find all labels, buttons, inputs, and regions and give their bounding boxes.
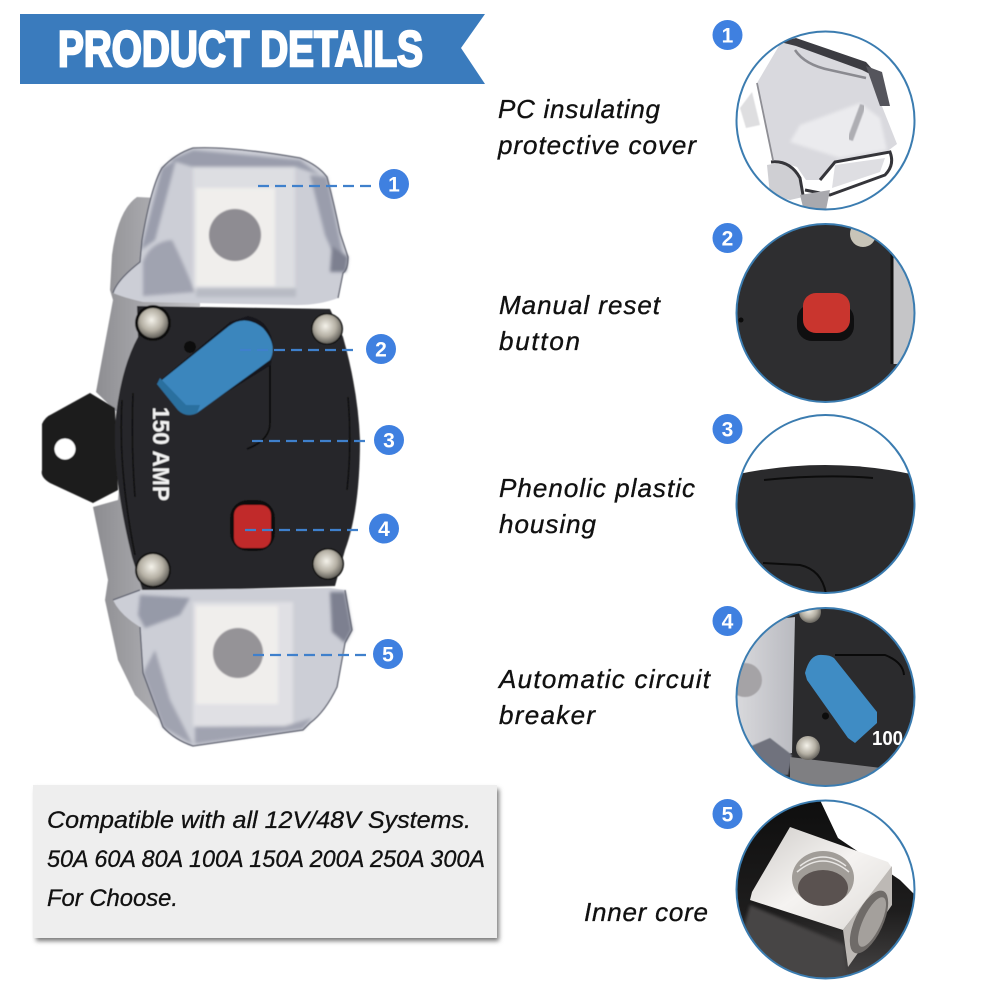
label 2: Manual reset [499, 290, 662, 320]
blue switch paddle [157, 316, 273, 415]
detail circle 5: inner core [736, 800, 916, 980]
mounting tab [42, 393, 118, 503]
detail circle 3: housing [736, 414, 916, 594]
number badge 4 [712, 606, 742, 636]
callout 4 [245, 514, 399, 544]
label 3: housing [499, 509, 597, 539]
number badge 5: 5 [722, 804, 734, 826]
callout 2: 2 [375, 338, 387, 362]
number badge 4: 4 [722, 610, 734, 634]
callout 4: 4 [378, 518, 390, 541]
label 4: breaker [499, 700, 596, 730]
number badge 3: 3 [722, 418, 733, 442]
number badge 2 [712, 223, 742, 253]
callout 3 [252, 425, 404, 455]
label 3 [499, 473, 695, 539]
black face plate [115, 306, 360, 592]
label 1: PC insulating [498, 94, 661, 124]
lower translucent cover [113, 588, 352, 746]
label 1 [497, 94, 697, 160]
number badge 1: 1 [722, 24, 734, 48]
callout 5: 5 [382, 644, 394, 666]
number badge 5 [712, 799, 742, 829]
label 4 [497, 664, 712, 730]
detail circle 4: circuit breaker paddle: 100 [872, 728, 903, 750]
rating text: 150 AMP [148, 407, 174, 501]
title banner: PRODUCT DETAILS [58, 21, 423, 77]
compatibility note panel: Compatible with all 12V/48V Systems. [47, 807, 471, 834]
callout 1 [258, 169, 409, 199]
label 5: Inner core [584, 897, 708, 927]
number badge 2: 2 [722, 228, 733, 250]
callout 3: 3 [383, 430, 395, 452]
callout 2 [240, 334, 396, 364]
slot line [247, 360, 270, 449]
compatibility note panel: 50A 60A 80A 100A 150A 200A 250A 300A [47, 846, 485, 873]
title banner [20, 14, 485, 84]
product photo: circuit breaker [42, 148, 360, 746]
red reset button [230, 500, 275, 551]
upper translucent cover [113, 148, 348, 305]
label 1: protective cover [497, 130, 697, 160]
compatibility note panel: For Choose. [47, 885, 178, 912]
number badge 3 [712, 414, 742, 444]
number badge 1 [712, 20, 742, 50]
callout 1: 1 [388, 174, 400, 196]
callout 5 [253, 639, 403, 669]
compatibility note panel [33, 785, 499, 941]
bolts [135, 305, 344, 588]
label 2 [499, 290, 662, 356]
label 4: Automatic circuit [497, 664, 712, 694]
label 3: Phenolic plastic [499, 473, 695, 503]
plate slits [121, 393, 350, 555]
grey housing side [93, 197, 200, 725]
detail circle 2: reset button [736, 223, 916, 403]
detail circle 4: circuit breaker paddle [736, 607, 916, 787]
label 2: button [499, 326, 580, 356]
detail circle 1: protective cover [736, 30, 916, 210]
